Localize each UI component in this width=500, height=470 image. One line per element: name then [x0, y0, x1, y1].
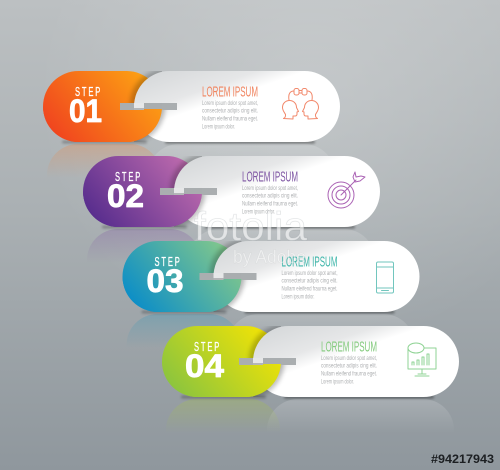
- step 2 connector tab: [160, 188, 217, 195]
- image id: #94217943: [431, 452, 494, 466]
- step 1 body text: Nullam eleifend fraurna eget.: [202, 116, 258, 122]
- step 4 number: 04: [185, 348, 224, 384]
- step 1 connector tab: [120, 103, 177, 110]
- step 3 colour overlap: [122, 277, 242, 312]
- step 1 label: STEP: [75, 86, 102, 100]
- step 4 body text: consectetur adipis cing elit.: [321, 362, 377, 370]
- step 2 number: 02: [107, 178, 144, 214]
- step 2 colour pill: [83, 156, 202, 230]
- icon: two heads with plug: [282, 88, 318, 119]
- step 2 colour overlap: [83, 192, 202, 227]
- step 2 heading: LOREM IPSUM: [242, 168, 298, 186]
- step 4 reflection: [166, 399, 454, 433]
- step 3 body text: Nullam eleifend fraurna eget.: [282, 286, 338, 292]
- step 4 heading: LOREM IPSUM: [321, 338, 377, 356]
- step 3 colour pill: [122, 241, 242, 314]
- step 2 body text: Lorem ipsum dolor.: [242, 208, 275, 216]
- step 1 heading: LOREM IPSUM: [202, 84, 258, 100]
- step 3 body text: consectetur adipis cing elit.: [282, 278, 338, 284]
- step 3 heading: LOREM IPSUM: [282, 254, 338, 270]
- step 4 body text: Lorem ipsum dolor spot amet,: [321, 355, 377, 362]
- step 1 body text: [202, 100, 258, 130]
- step 1 white pill: [134, 71, 340, 145]
- step 2 body text: consectetur adipis cing elit.: [242, 192, 298, 200]
- step 4 label: STEP: [194, 341, 221, 355]
- step 2 body text: Lorem ipsum dolor spot amet,: [242, 185, 298, 192]
- step 2 reflection: [87, 229, 375, 263]
- step 1 colour overlap: [43, 107, 162, 142]
- step 4 body text: Nullam eleifend fraurna eget.: [321, 370, 377, 378]
- step 3: [122, 239, 420, 348]
- step 4 white pill: [253, 326, 459, 400]
- step 3 reflection: [126, 314, 414, 348]
- step 4: [162, 326, 459, 424]
- step 3 body text: Lorem ipsum dolor.: [282, 294, 315, 300]
- step 3 body text: [282, 270, 338, 300]
- step 2: [83, 156, 380, 252]
- step 2 body text: Nullam eleifend fraurna eget.: [242, 200, 298, 208]
- step 2 body text: [242, 185, 298, 216]
- step 3 number: 03: [146, 263, 184, 299]
- watermark: by Adobe: by Adobe: [233, 247, 306, 267]
- step 1: [43, 69, 340, 178]
- step 3 body text: Lorem ipsum dolor spot amet,: [282, 270, 338, 277]
- icon: monitor with chart and speech bubble: [408, 343, 436, 376]
- step 1 body text: Lorem ipsum dolor spot amet,: [202, 100, 258, 107]
- watermark: fotolia: fotolia: [194, 205, 308, 249]
- step 1 body text: Lorem ipsum dolor.: [202, 124, 235, 130]
- step 1 body text: consectetur adipis cing elit.: [202, 108, 258, 114]
- step 4 colour overlap: [162, 362, 281, 397]
- step 2 white pill: [174, 156, 380, 230]
- step 4 body text: Lorem ipsum dolor.: [321, 378, 354, 386]
- step 1 reflection: [47, 144, 335, 178]
- step 3 white pill: [214, 241, 420, 315]
- icon: smartphone: [376, 262, 394, 293]
- icon: target with arrow: [328, 172, 365, 208]
- step 3 label: STEP: [154, 256, 182, 270]
- step 1 colour pill: [43, 71, 162, 144]
- step 3 connector tab: [200, 273, 256, 280]
- step 1 number: 01: [69, 93, 102, 129]
- step 4 colour pill: [162, 326, 281, 400]
- step 2 label: STEP: [115, 171, 142, 185]
- step 4 body text: [321, 355, 377, 386]
- step 4 connector tab: [239, 358, 296, 365]
